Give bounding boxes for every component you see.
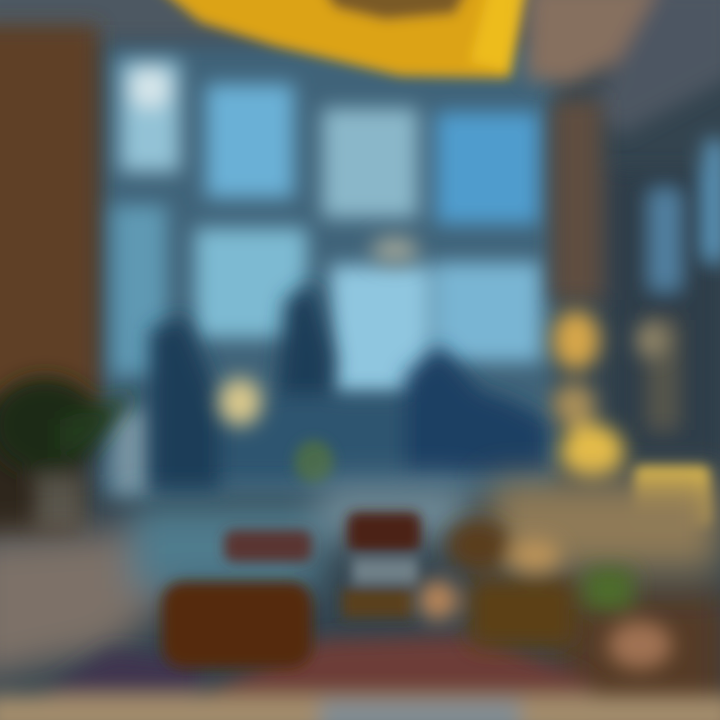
dark silhouettes outside the window	[150, 280, 548, 495]
right bottom warm furniture	[490, 480, 720, 720]
right structural column and right windows	[552, 100, 720, 460]
rug and bottom band	[0, 635, 720, 720]
chairs	[162, 512, 421, 668]
window panes lower row	[112, 205, 542, 495]
ceiling: yellow lit panel	[155, 0, 530, 78]
ceiling: wood panel right	[525, 0, 720, 135]
yellow lamp shade	[634, 466, 710, 526]
window panes upper row	[120, 60, 540, 224]
small plant center	[294, 440, 334, 484]
floor left	[0, 485, 470, 680]
left brown column	[0, 25, 98, 540]
plant left	[0, 377, 135, 530]
warm glow lamps	[218, 236, 668, 480]
side table and armchair right	[418, 519, 672, 669]
window wall base	[0, 0, 562, 502]
